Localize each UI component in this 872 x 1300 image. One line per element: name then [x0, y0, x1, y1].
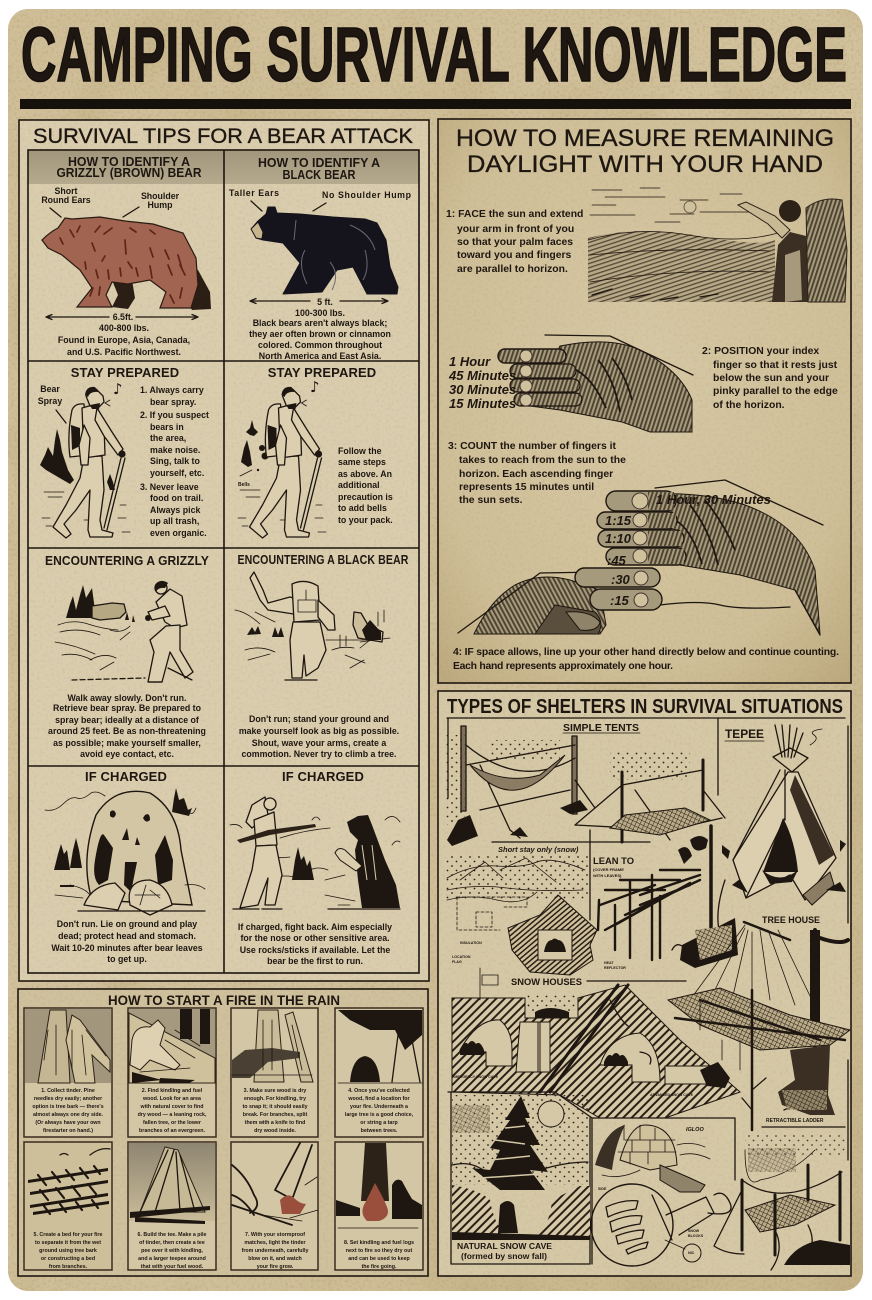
- card 4: 4. Once you've collected: [348, 1088, 410, 1094]
- card 4: or string a tarp: [360, 1120, 398, 1126]
- cell: stay prepared black bear: [238, 365, 393, 538]
- card 8: the fire going.: [361, 1264, 397, 1270]
- cell: encountering a black bear: ENCOUNTERING A BLACK BEAR: [238, 552, 409, 567]
- card 1: needles dry easily; another: [34, 1096, 102, 1102]
- icon: black bear scene: [235, 572, 390, 680]
- card 1: firestarter on hand.): [43, 1128, 93, 1134]
- illustration: hand, four fingers: [448, 335, 693, 432]
- step 1 text: [446, 209, 583, 275]
- illustration: hand, four fingers: 1 Hour: [449, 354, 491, 369]
- hammock shelter: [714, 1135, 850, 1270]
- heading: daylight: DAYLIGHT WITH YOUR HAND: [467, 151, 823, 178]
- cell: stay prepared grizzly: Sing, talk to: [150, 456, 200, 466]
- snow houses: ADVANCED SNOW CAVE: [650, 1093, 694, 1097]
- igloo: SIDE: [598, 1187, 607, 1191]
- cell: identify grizzly: 6.5ft.: [113, 312, 133, 322]
- illustration: two hands counting: [458, 480, 823, 635]
- cell: stay prepared grizzly: bear spray.: [150, 397, 196, 407]
- cell: stay prepared grizzly: make noise.: [150, 445, 200, 455]
- heading: daylight: HOW TO MEASURE REMAINING: [456, 125, 834, 152]
- cell: stay prepared grizzly: 2. If you suspect: [140, 410, 209, 420]
- cell: if charged black bear: for the nose or other sensitive area.: [240, 933, 390, 943]
- cell: stay prepared black bear: to add bells: [338, 503, 387, 513]
- cell: encountering a grizzly: Retrieve bear spray. Be prepared to: [53, 703, 202, 713]
- step 3 text: the sun sets.: [459, 495, 523, 506]
- illustration: hiker facing the sun: [588, 188, 847, 302]
- card 8: [335, 1142, 423, 1270]
- card 5: 5. Create a bed for your fire: [34, 1232, 102, 1238]
- cell: stay prepared grizzly: the area,: [150, 433, 186, 443]
- panel: measure remaining daylight: [438, 119, 851, 683]
- card 5: ground using tree bark: [39, 1248, 97, 1254]
- lean to: REFLECTOR: [604, 966, 626, 970]
- cell: stay prepared black bear: to your pack.: [338, 515, 393, 525]
- card 7: from underneath, carefully: [242, 1248, 308, 1254]
- cell: identify black bear: North America and East Asia.: [259, 351, 381, 361]
- cell: if charged grizzly: dead; protect head and stomach.: [58, 931, 196, 941]
- cell: identify black bear: BLACK BEAR: [282, 168, 356, 182]
- card 2: wood. Look for an area: [142, 1096, 201, 1102]
- cell: stay prepared grizzly: even organic.: [150, 528, 207, 538]
- card 7: matches, light the tinder: [244, 1240, 306, 1246]
- card 4: between trees.: [361, 1128, 398, 1134]
- card 4: [335, 1008, 423, 1137]
- cell: if charged grizzly: [45, 769, 205, 964]
- panel: survival tips for a bear attack: [19, 120, 429, 981]
- illustration: two hands counting: 1 Hour, 30 Minutes: [656, 492, 771, 507]
- illustration: hand, four fingers: 45 Minutes: [448, 368, 516, 383]
- card 6: that with your fuel wood.: [141, 1264, 204, 1270]
- heading: daylight: [456, 125, 834, 178]
- card 5: or constructing a bed: [41, 1256, 95, 1262]
- cell: identify black bear: colored. Common throughout: [258, 340, 382, 350]
- card 7: your fire grow.: [257, 1264, 294, 1270]
- card 1: almost always one dry side.: [33, 1112, 104, 1118]
- icon: charging grizzly: [45, 788, 205, 915]
- illustration: two hands counting: :15: [610, 593, 630, 608]
- tree house: [668, 915, 850, 1130]
- step 1 text: are parallel to horizon.: [457, 264, 568, 275]
- cell: identify black bear: 5 ft.: [317, 297, 333, 307]
- cell: stay prepared grizzly: yourself, etc.: [150, 468, 204, 478]
- cell: identify grizzly: and U.S. Pacific Northwest.: [67, 347, 181, 357]
- cell: identify grizzly: Shoulder: [141, 191, 180, 201]
- step 4 text: 4: IF space allows, line up your other hand directly below and continue counting.: [453, 647, 839, 658]
- cell: encountering a grizzly: avoid eye contact, etc.: [80, 749, 174, 759]
- tree house: RETRACTIBLE LADDER: [766, 1118, 824, 1124]
- panel: types of shelters: [438, 691, 851, 1276]
- cell: if charged grizzly: Wait 10-20 minutes after bear leaves: [51, 943, 203, 953]
- cell: stay prepared grizzly: 1. Always carry: [140, 385, 204, 395]
- card 2: with natural cover to find: [140, 1104, 203, 1110]
- step 2 text: 2: POSITION your index: [702, 346, 819, 357]
- card 2: [128, 1008, 216, 1137]
- tepee: [722, 725, 846, 905]
- icon: grizzly bear: [42, 217, 211, 310]
- cell: identify grizzly: Short: [55, 186, 78, 196]
- card 2: dry wood — a leaning rock,: [138, 1112, 207, 1118]
- natural snow cave: [448, 1092, 592, 1264]
- illustration: two hands counting: :45: [607, 553, 627, 568]
- step 1 text: toward you and fingers: [457, 250, 572, 261]
- illustration: two hands counting: 1:10: [605, 531, 632, 546]
- illustration: two hands counting: 1:15: [605, 513, 632, 528]
- icon: hiker: [53, 387, 126, 538]
- lean to: WITH LEAVES): [593, 873, 622, 878]
- short stay snow shelter: Short stay only (snow): [498, 845, 579, 854]
- snow houses: [452, 968, 740, 1118]
- cell: encountering a grizzly: spray bear; ideally at a distance of: [55, 715, 199, 725]
- cell: stay prepared black bear: same steps: [338, 457, 386, 467]
- cell: stay prepared grizzly: STAY PREPARED: [71, 365, 179, 380]
- icon: black bear: [251, 207, 398, 294]
- cell: encountering a black bear: make yourself look as big as possible.: [239, 726, 399, 736]
- cell: stay prepared grizzly: Spray: [38, 396, 62, 406]
- card 1: 1. Collect tinder. Pine: [41, 1088, 95, 1094]
- card 3: break. For branches, split: [243, 1112, 307, 1118]
- short stay snow shelter: FLAG: [452, 960, 462, 964]
- illustration: two hands counting: :30: [611, 572, 631, 587]
- card 3: [231, 1008, 318, 1137]
- card 2: branches of an evergreen.: [139, 1128, 205, 1134]
- cell: stay prepared grizzly: bears in: [150, 422, 184, 432]
- step 2 text: of the horizon.: [713, 400, 785, 411]
- cell: identify grizzly: [41, 155, 211, 357]
- icon: trees and bells: [241, 420, 258, 467]
- cell: if charged grizzly: IF CHARGED: [85, 769, 167, 784]
- igloo: NIC: [688, 1251, 695, 1255]
- cell: stay prepared black bear: Follow the: [338, 446, 382, 456]
- step 2 text: finger so that it rests just: [713, 360, 838, 371]
- cell: stay prepared grizzly: up all trash,: [150, 516, 199, 526]
- tepee: TEPEE: [725, 727, 764, 741]
- icon: hiker and standing bear: [230, 797, 400, 909]
- cell: if charged black bear: bear be the first to run.: [267, 956, 363, 966]
- step 4 text: Each hand represents approximately one hour.: [453, 661, 673, 672]
- igloo: BLOCKS: [688, 1234, 704, 1238]
- icon: hiker: [250, 387, 322, 538]
- card 4: large tree is a good choice,: [345, 1112, 414, 1118]
- cell: identify black bear: [229, 156, 412, 361]
- icon: grizzly scene: [55, 581, 193, 682]
- igloo: SNOW: [688, 1229, 700, 1233]
- cell: identify grizzly: Round Ears: [41, 195, 91, 205]
- cell: identify black bear: they aer often brown or cinnamon: [249, 329, 391, 339]
- comparison grid: [28, 150, 419, 973]
- cell: encountering a black bear: Shout, wave your arms, create a: [252, 738, 386, 748]
- cell: stay prepared grizzly: [38, 365, 209, 538]
- panel: how to start a fire in the rain: [18, 989, 428, 1276]
- snow houses: SNOW HOUSES: [511, 977, 582, 987]
- card 3: dry wood inside.: [254, 1128, 296, 1134]
- cell: identify grizzly: 400-800 lbs.: [99, 323, 149, 333]
- short stay snow shelter: [445, 845, 597, 975]
- card 6: and a larger teepee around: [138, 1256, 206, 1262]
- card 6: of tinder, then create a tee: [139, 1240, 205, 1246]
- cell: stay prepared black bear: Bells: [238, 482, 250, 488]
- cell: identify black bear: No Shoulder Hump: [322, 190, 412, 200]
- card 3: to snap it; it should easily: [242, 1104, 308, 1110]
- frame lines: [447, 718, 848, 1160]
- simple tents: SIMPLE TENTS: [563, 722, 639, 734]
- card 6: pee over it with kindling,: [141, 1248, 203, 1254]
- step 3 text: represents 15 minutes until: [459, 482, 594, 493]
- short stay snow shelter: INSULATION: [460, 941, 482, 945]
- step 1 text: your arm in front of you: [457, 224, 574, 235]
- cell: identify grizzly: Found in Europe, Asia, Canada,: [58, 335, 190, 345]
- cell: encountering a black bear: commotion. Never try to climb a tree.: [242, 749, 396, 759]
- step 4 text: [453, 647, 839, 672]
- cell: identify black bear: Taller Ears: [229, 188, 279, 198]
- illustration: hand, four fingers: 15 Minutes: [449, 396, 516, 411]
- card 1: (Or always have your own: [35, 1120, 101, 1126]
- illustration: hand, four fingers: 30 Minutes: [449, 382, 516, 397]
- card 7: 7. With your stormproof: [245, 1232, 305, 1238]
- card 8: next to fire so they dry out: [346, 1248, 412, 1254]
- cell: if charged black bear: If charged, fight back. Aim especially: [238, 922, 392, 932]
- card 3: them with a knife to find: [245, 1120, 305, 1126]
- card 6: 6. Build the tee. Make a pile: [138, 1232, 206, 1238]
- header: black bear: HOW TO IDENTIFY A: [258, 156, 380, 170]
- cell: identify grizzly: GRIZZLY (BROWN) BEAR: [56, 166, 202, 180]
- lean to: (COVER FRAME: [593, 867, 624, 872]
- step 2 text: pinky parallel to the edge: [713, 386, 838, 397]
- cell: encountering a black bear: [235, 552, 409, 759]
- icon: trees: [40, 429, 74, 484]
- cell: identify black bear: 100-300 lbs.: [295, 308, 345, 318]
- natural snow cave: (formed by snow fall): [461, 1252, 547, 1261]
- step 2 text: [702, 346, 838, 411]
- cell: encountering a grizzly: as possible; make yourself smaller,: [53, 738, 201, 748]
- cell: stay prepared black bear: precaution is: [338, 492, 393, 502]
- cell: stay prepared black bear: as above. An: [338, 469, 392, 479]
- simple tents: [445, 722, 725, 846]
- tree house: TREE HOUSE: [762, 915, 820, 925]
- card 3: 3. Make sure wood is dry: [244, 1088, 306, 1094]
- cell: if charged black bear: IF CHARGED: [282, 769, 364, 784]
- step 1 text: 1: FACE the sun and extend: [446, 209, 583, 220]
- heading: bear attack: SURVIVAL TIPS FOR A BEAR ATTACK: [33, 124, 414, 148]
- step 3 text: takes to reach from the sun to the: [459, 455, 626, 466]
- card 7: blow on it, and watch: [248, 1256, 302, 1262]
- step 2 text: below the sun and your: [713, 373, 829, 384]
- lean to: [593, 826, 738, 970]
- cell: if charged black bear: Use rocks/sticks if available. Let the: [240, 945, 390, 955]
- step 3 text: [448, 441, 626, 506]
- cell: encountering a grizzly: [45, 553, 209, 759]
- igloo: [591, 1118, 735, 1266]
- card 2: fallen tree, or the lower: [143, 1120, 201, 1126]
- step 3 text: 3: COUNT the number of fingers it: [448, 441, 617, 452]
- snow houses: EMERGENCY SNOW CAVE: [452, 1075, 499, 1079]
- lean to: HEAT: [604, 961, 614, 965]
- card 8: 8. Set kindling and fuel logs: [344, 1240, 414, 1246]
- cell: stay prepared grizzly: ♪: [113, 380, 123, 398]
- card 6: [128, 1142, 216, 1270]
- cell: encountering a black bear: Don't run; stand your ground and: [249, 714, 389, 724]
- card 7: [231, 1142, 318, 1270]
- cell: stay prepared black bear: additional: [338, 480, 380, 490]
- lean to: LEAN TO: [593, 856, 634, 867]
- cell: stay prepared grizzly: Bear: [40, 384, 60, 394]
- cell: stay prepared grizzly: Always pick: [150, 505, 200, 515]
- cell: stay prepared black bear: ♪: [310, 378, 320, 396]
- cell: identify black bear: Black bears aren't always black;: [253, 318, 387, 328]
- cell: if charged grizzly: Don't run. Lie on ground and play: [57, 919, 197, 929]
- step 1 text: so that your palm faces: [457, 237, 573, 248]
- cell: stay prepared grizzly: 3. Never leave: [140, 482, 199, 492]
- cell: encountering a grizzly: ENCOUNTERING A GRIZZLY: [45, 553, 209, 568]
- card 5: to separate it from the wet: [35, 1240, 101, 1246]
- card 1: [24, 1008, 112, 1137]
- short stay snow shelter: LOCATION: [452, 955, 471, 959]
- card 4: your fire. Underneath a: [350, 1104, 408, 1110]
- heading: fire: HOW TO START A FIRE IN THE RAIN: [108, 993, 340, 1008]
- card 4: wood, find a location for: [347, 1096, 410, 1102]
- card 5: from branches.: [49, 1264, 88, 1270]
- card 3: enough. For kindling, try: [244, 1096, 306, 1102]
- natural snow cave: NATURAL SNOW CAVE: [457, 1242, 552, 1251]
- card 8: and can be used to keep: [348, 1256, 411, 1262]
- cell: if charged black bear: [230, 769, 400, 966]
- card 1: option is tree bark — there's: [32, 1104, 104, 1110]
- cell: encountering a grizzly: around 25 feet. Be as non-threatening: [48, 726, 206, 736]
- step 3 text: horizon. Each ascending finger: [459, 469, 613, 480]
- card 2: 2. Find kindling and fuel: [142, 1088, 203, 1094]
- igloo: IGLOO: [686, 1127, 704, 1133]
- header: grizzly: HOW TO IDENTIFY A: [68, 155, 190, 169]
- title rule: [20, 99, 851, 109]
- cell: encountering a grizzly: Walk away slowly. Don't run.: [68, 693, 186, 703]
- card 5: [24, 1142, 112, 1270]
- cell: if charged grizzly: to get up.: [107, 954, 147, 964]
- cell: stay prepared black bear: STAY PREPARED: [268, 365, 376, 380]
- cell: stay prepared grizzly: food on trail.: [150, 493, 203, 503]
- cell: identify grizzly: Hump: [148, 200, 173, 210]
